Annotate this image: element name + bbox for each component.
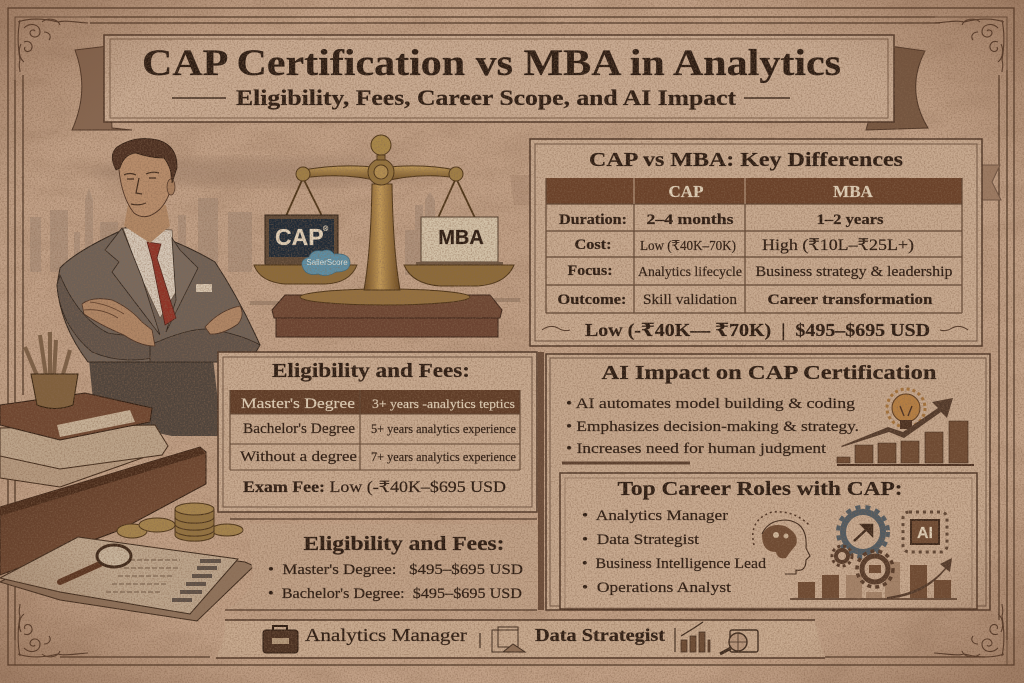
heading: CAP vs MBA: Key Differences (589, 149, 903, 171)
footer label: Data Strategist (535, 625, 665, 645)
face features (124, 172, 159, 205)
roles list: • Business Intelligence Lead (582, 556, 767, 572)
eligibility table: 7+ years analytics experience (371, 449, 516, 464)
pencils (25, 332, 70, 378)
panel divider (538, 352, 544, 610)
upper crossed arm (57, 275, 152, 360)
icon: rising bar chart (837, 421, 974, 465)
roles list (582, 508, 767, 596)
arrow: growth (841, 398, 953, 447)
title: CAP Certification vs MBA in Analytics (142, 43, 841, 84)
bottom book (0, 444, 165, 487)
MBA card (416, 217, 503, 267)
panel: top career roles (560, 473, 977, 609)
neck (124, 205, 170, 243)
comparison table: 1–2 years (816, 212, 884, 228)
icon: large gear with arrow (838, 507, 888, 557)
CAP card: ® (323, 225, 329, 233)
list item: • Bachelor's Degree: $495–$695 USD (268, 586, 522, 602)
top book pages (57, 410, 135, 437)
comparison table: MBA (833, 182, 874, 201)
icon: career bar chart (790, 562, 957, 599)
panel: eligibility and fees list (225, 519, 537, 610)
corner ornament: bottom right (934, 604, 1004, 657)
shirt (123, 228, 176, 318)
middle book (0, 425, 168, 469)
paper sheet (0, 537, 238, 614)
comparison table: Career transformation (768, 292, 932, 308)
sleeve (150, 329, 260, 362)
eligibility table: Without a degree (240, 449, 357, 465)
roles list: • Data Strategist (582, 532, 699, 548)
base oval (300, 289, 470, 305)
heading: AI Impact on CAP Certification (602, 362, 937, 384)
icon: magnifier and case (720, 630, 758, 654)
footer label: Analytics Manager (305, 625, 467, 645)
panel ornaments (542, 326, 968, 331)
roles list: • Analytics Manager (582, 508, 728, 524)
post (364, 184, 400, 290)
pot (31, 374, 78, 408)
torso lower (88, 350, 222, 436)
footer bar (216, 620, 825, 658)
heading: Eligibility and Fees: (272, 361, 470, 382)
panel: eligibility and fees table (218, 352, 537, 512)
comparison table: Business strategy & leadership (756, 264, 952, 280)
tie (147, 242, 176, 325)
right pan chains (438, 178, 475, 218)
comparison table: 2–4 months (646, 212, 734, 228)
eligibility table: 3+ years -analytics teptics (372, 397, 515, 411)
cost summary: Low (-₹40K— ₹70K) | $495–$695 USD (585, 320, 930, 341)
title banner (104, 35, 894, 122)
hair (112, 139, 177, 183)
suit (57, 226, 260, 362)
pocket square (196, 284, 212, 292)
underline (562, 462, 690, 464)
icon: briefcase (263, 626, 298, 653)
eligibility table: 5+ years analytics experience (371, 421, 516, 436)
comparison table: Low (₹40K–70K) (640, 238, 736, 253)
illustration: businessman with crossed arms (57, 139, 260, 436)
comparison table: Outcome: (558, 292, 626, 308)
illustration: coin stacks (117, 503, 243, 541)
subtitle: Eligibility, Fees, Career Scope, and AI Impact (236, 85, 737, 110)
footer separator (479, 633, 481, 648)
ear (167, 179, 175, 195)
illustration: balance scale (254, 135, 514, 337)
fingers (84, 302, 124, 318)
icon: AI chip (903, 512, 947, 552)
head (119, 147, 171, 217)
CAP card: CAP (275, 224, 324, 250)
comparison table (546, 178, 962, 313)
roles list: • Operations Analyst (582, 580, 731, 596)
plinth (272, 295, 502, 318)
icon: head with brain (753, 512, 810, 574)
bullet list: • Emphasizes decision-making & strategy. (566, 419, 859, 435)
beam end balls (296, 167, 310, 181)
icon: small gears (832, 546, 893, 587)
blue cloud badge (302, 250, 350, 276)
top book (0, 393, 152, 440)
illustration: desk, books and pencil pot (0, 332, 206, 575)
heading: Eligibility and Fees: (304, 534, 504, 555)
desk body (0, 447, 206, 575)
icon: documents (492, 627, 525, 652)
icon: light bulb (887, 389, 925, 429)
footer separator (674, 628, 676, 652)
corner ornament: bottom left (18, 604, 88, 657)
comparison table: Analytics lifecycle (638, 265, 742, 280)
icon: mini bar chart (681, 622, 710, 652)
finial (377, 155, 385, 160)
comparison table: Duration: (559, 212, 627, 228)
comparison table: Cost: (574, 237, 612, 253)
comparison table: Focus: (568, 263, 612, 279)
title ribbon right (866, 46, 928, 130)
exam fee: Exam Fee: Low (-₹40K–$695 USD (243, 479, 506, 496)
side tabs (510, 175, 530, 205)
panel: AI impact (546, 354, 990, 610)
desk edge (0, 447, 205, 516)
panel: key differences (510, 139, 1001, 346)
bullet list: • AI automates model building & coding (566, 396, 856, 412)
CAP card (265, 215, 338, 268)
eligibility table (230, 390, 520, 470)
comparison table: CAP (669, 182, 703, 201)
background haze and skyline (30, 158, 520, 303)
title ribbon left (72, 46, 132, 130)
eligibility table: Bachelor's Degree (243, 421, 355, 437)
bullet list: • Increases need for human judgment (566, 441, 827, 457)
left hand (82, 299, 155, 346)
list item: • Master's Degree: $495–$695 USD (268, 562, 523, 578)
icon: AI chip: AI (917, 525, 933, 542)
MBA card: MBA (438, 227, 484, 249)
arrow: career growth (887, 558, 952, 599)
illustration: report with magnifier (0, 537, 254, 621)
heading: Top Career Roles with CAP: (618, 478, 902, 500)
subtitle rules (172, 97, 790, 99)
paper stack (0, 541, 254, 621)
magnifier (60, 564, 100, 582)
hub (368, 159, 394, 185)
lapels (105, 228, 198, 335)
right pan (404, 265, 514, 286)
left pan (254, 265, 357, 284)
bullet list (566, 396, 859, 457)
comparison table: High (₹10L–₹25L+) (762, 237, 914, 254)
eligibility table: Master's Degree (241, 396, 355, 412)
blue cloud badge: SallerScore (306, 258, 348, 267)
corner ornament: top right (934, 19, 1004, 72)
right hand (205, 306, 242, 334)
report rows (172, 561, 221, 600)
comparison table: Skill validation (643, 292, 738, 308)
beam (303, 166, 456, 182)
left pan chains (286, 178, 322, 216)
corner ornament: top left (18, 19, 88, 72)
